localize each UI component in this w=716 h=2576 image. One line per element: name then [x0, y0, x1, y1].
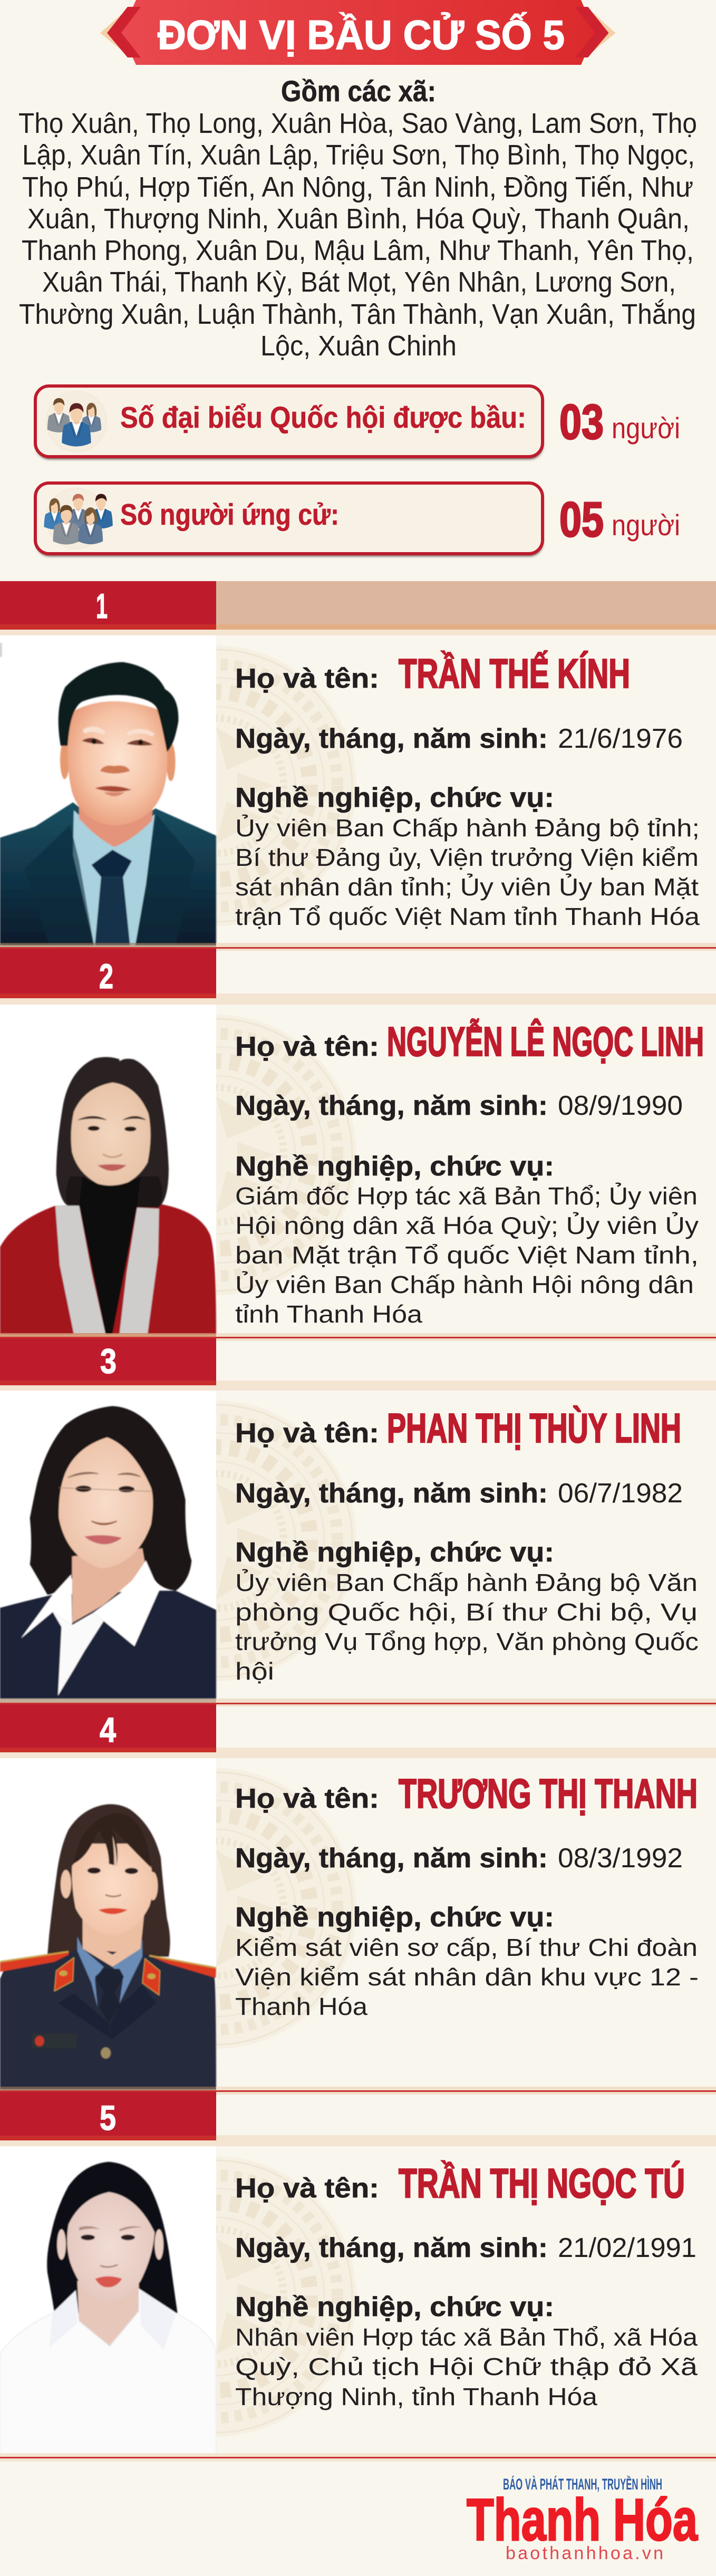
occupation: Kiểm sát viên sơ cấp, Bí thư Chi đoàn: [235, 1934, 698, 1961]
number bar 2: [0, 943, 716, 1005]
occupation: Quỳ, Chủ tịch Hội Chữ thập đỏ Xã: [235, 2353, 698, 2380]
date of birth: [235, 723, 683, 754]
date of birth: 06/7/1982: [558, 1478, 683, 1509]
stat box: candidates: [35, 483, 680, 556]
occupation: sát nhân dân tỉnh; Ủy viên Ủy ban Mặt: [235, 873, 699, 901]
date of birth: Ngày, tháng, năm sinh:: [235, 1843, 548, 1874]
logo: [467, 2475, 698, 2563]
commune list: Thọ Phú, Hợp Tiến, An Nông, Tân Ninh, Đồng Tiến, Như: [22, 171, 693, 203]
occupation: [235, 783, 700, 930]
number bar 4: [0, 1699, 716, 1758]
name row: Họ và tên:: [235, 663, 379, 694]
name row: Họ và tên:: [235, 1031, 379, 1062]
date of birth: 08/3/1992: [558, 1843, 683, 1874]
value: 05: [559, 492, 604, 547]
commune list: Lộc, Xuân Chinh: [260, 330, 457, 362]
label: Số đại biểu Quốc hội được bầu:: [120, 401, 526, 435]
unit: người: [612, 411, 680, 445]
photo: Trần Thị Ngọc Tú: [0, 2162, 216, 2455]
date of birth: Ngày, tháng, năm sinh:: [235, 1091, 548, 1121]
number bar 1: [0, 581, 716, 635]
occupation: Nghề nghiệp, chức vụ:: [235, 1151, 554, 1182]
occupation: phòng Quốc hội, Bí thư Chi bộ, Vụ: [235, 1598, 698, 1626]
candidate 2 panel: [0, 1005, 704, 1334]
date of birth: 08/9/1990: [558, 1091, 683, 1121]
name row: Họ và tên:: [235, 2173, 379, 2204]
date of birth: Ngày, tháng, năm sinh:: [235, 2233, 548, 2263]
number bar 1: 1: [96, 586, 108, 625]
number bar 3: 3: [100, 1342, 117, 1381]
title: ĐƠN VỊ BẦU CỬ SỐ 5: [158, 12, 565, 58]
closing divider: [0, 2453, 716, 2462]
candidate 5 panel: [0, 2146, 698, 2457]
photo: Nguyễn Lê Ngọc Linh: [0, 1057, 216, 1334]
number bar 5: 5: [100, 2098, 116, 2137]
name row: [235, 1770, 698, 1817]
number bar 2: 2: [99, 957, 113, 996]
occupation: tỉnh Thanh Hóa: [235, 1300, 422, 1328]
name row: [235, 1405, 681, 1451]
occupation: [235, 1537, 699, 1685]
commune list: [18, 74, 697, 362]
logo: website: baothanhhoa.vn: [506, 2543, 663, 2563]
occupation: Hội nông dân xã Hóa Quỳ; Ủy viên Ủy: [235, 1212, 699, 1239]
occupation: Nghề nghiệp, chức vụ:: [235, 2292, 554, 2322]
commune list: Xuân, Thượng Ninh, Xuân Bình, Hóa Quỳ, Thanh Quân,: [27, 203, 690, 235]
occupation: Viện kiểm sát nhân dân khu vực 12 -: [235, 1963, 699, 1991]
date of birth: Ngày, tháng, năm sinh:: [235, 1478, 548, 1509]
occupation: Nghề nghiệp, chức vụ:: [235, 783, 554, 813]
occupation: Ủy viên Ban Chấp hành Hội nông dân: [235, 1271, 694, 1298]
candidate 1 panel: [0, 635, 700, 946]
number bar 4: 4: [100, 1710, 116, 1749]
candidate 3 panel: [0, 1391, 699, 1702]
number bar 3: [0, 1333, 716, 1391]
occupation: [235, 1902, 699, 2020]
occupation: hội: [235, 1657, 274, 1685]
occupation: trưởng Vụ Tổng hợp, Văn phòng Quốc: [235, 1628, 699, 1655]
unit: người: [612, 508, 680, 542]
date of birth: 21/02/1991: [558, 2233, 696, 2263]
icon: three delegates: [46, 391, 107, 452]
value: 03: [559, 394, 604, 449]
photo: Trần Thế Kính: [0, 643, 216, 945]
occupation: trận Tổ quốc Việt Nam tỉnh Thanh Hóa: [235, 903, 700, 930]
stat box: deputies to elect: [35, 386, 680, 459]
occupation: Ủy viên Ban Chấp hành Đảng bộ tỉnh;: [235, 814, 700, 842]
occupation: [235, 1151, 699, 1328]
commune list: Xuân Thái, Thanh Kỳ, Bát Mọt, Yên Nhân, Lương Sơn,: [42, 266, 676, 298]
name row: Họ và tên:: [235, 1418, 379, 1449]
photo: Phan Thị Thùy Linh: [0, 1406, 216, 1699]
occupation: Thanh Hóa: [235, 1993, 367, 2020]
occupation: Giám đốc Hợp tác xã Bản Thổ; Ủy viên: [235, 1182, 698, 1210]
occupation: Nghề nghiệp, chức vụ:: [235, 1902, 554, 1933]
occupation: ban Mặt trận Tổ quốc Việt Nam tỉnh,: [235, 1241, 699, 1269]
name row: Họ và tên:: [235, 1783, 379, 1814]
date of birth: 21/6/1976: [558, 723, 683, 754]
date of birth: [235, 1478, 683, 1509]
label: Số người ứng cử:: [120, 498, 339, 532]
commune list heading: Gồm các xã:: [281, 74, 436, 108]
date of birth: [235, 2233, 696, 2263]
occupation: Nhân viên Hợp tác xã Bản Thổ, xã Hóa: [235, 2323, 698, 2351]
occupation: Thượng Ninh, tỉnh Thanh Hóa: [235, 2383, 597, 2410]
name row: [235, 2160, 685, 2206]
name row: [235, 650, 630, 697]
occupation: Nghề nghiệp, chức vụ:: [235, 1537, 554, 1568]
date of birth: [235, 1091, 683, 1121]
photo: Trương Thị Thanh: [0, 1804, 216, 2089]
occupation: Ủy viên Ban Chấp hành Đảng bộ Văn: [235, 1569, 698, 1596]
header banner: [100, 0, 616, 65]
name row: TRẦN THẾ KÍNH: [399, 650, 630, 697]
number bar 5: [0, 2087, 716, 2146]
icon: five candidates: [44, 488, 113, 549]
occupation: Bí thư Đảng ủy, Viện trưởng Viện kiểm: [235, 844, 699, 871]
candidate 4 panel: [0, 1758, 699, 2090]
date of birth: Ngày, tháng, năm sinh:: [235, 723, 548, 754]
occupation: [235, 2292, 698, 2410]
date of birth: [235, 1843, 683, 1874]
name row: [235, 1018, 704, 1065]
